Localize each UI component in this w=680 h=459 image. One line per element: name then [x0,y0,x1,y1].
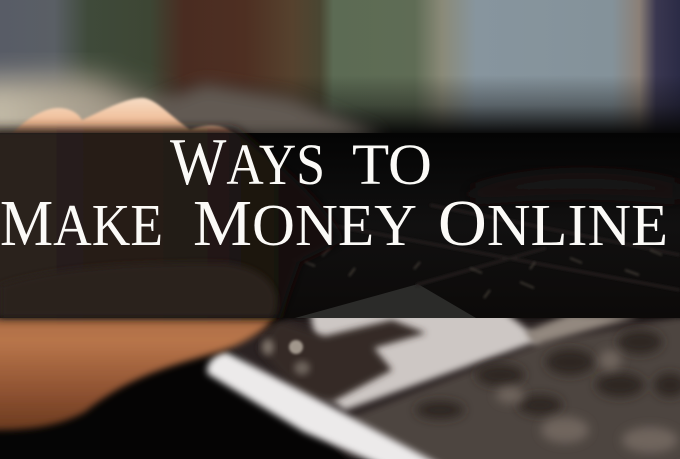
hand: finger below the band [0,312,273,430]
blurred laptop edge [150,84,385,136]
keyboard seen through band [295,284,476,318]
hand: fingertips above the band [8,98,238,138]
title line 2: Make Money Online [0,187,668,260]
title line 1: Ways to: TO [352,132,432,197]
finger seen through band [0,263,277,318]
dark keys on panel [258,320,426,402]
title line 1: Ways to: WAYS [170,125,325,199]
keyboard, blurred lower part [100,310,680,459]
white keyboard panel [310,312,540,410]
pale strip right of panel [525,314,640,345]
dark hand seen through band [0,128,345,318]
title line 2: Make Money Online: ONLINE [438,187,668,260]
title line 2: Make Money Online: MONEY [193,187,417,260]
dark keyboard body [225,318,680,459]
title line 2: Make Money Online: MAKE [0,187,163,260]
desk surface behind hand [0,75,190,150]
dark title band [0,128,680,318]
bright white strip [207,352,450,459]
title [170,125,432,199]
blurred key pattern [416,330,680,419]
lower-right key field [350,316,680,459]
title line 1: Ways to [170,125,432,199]
